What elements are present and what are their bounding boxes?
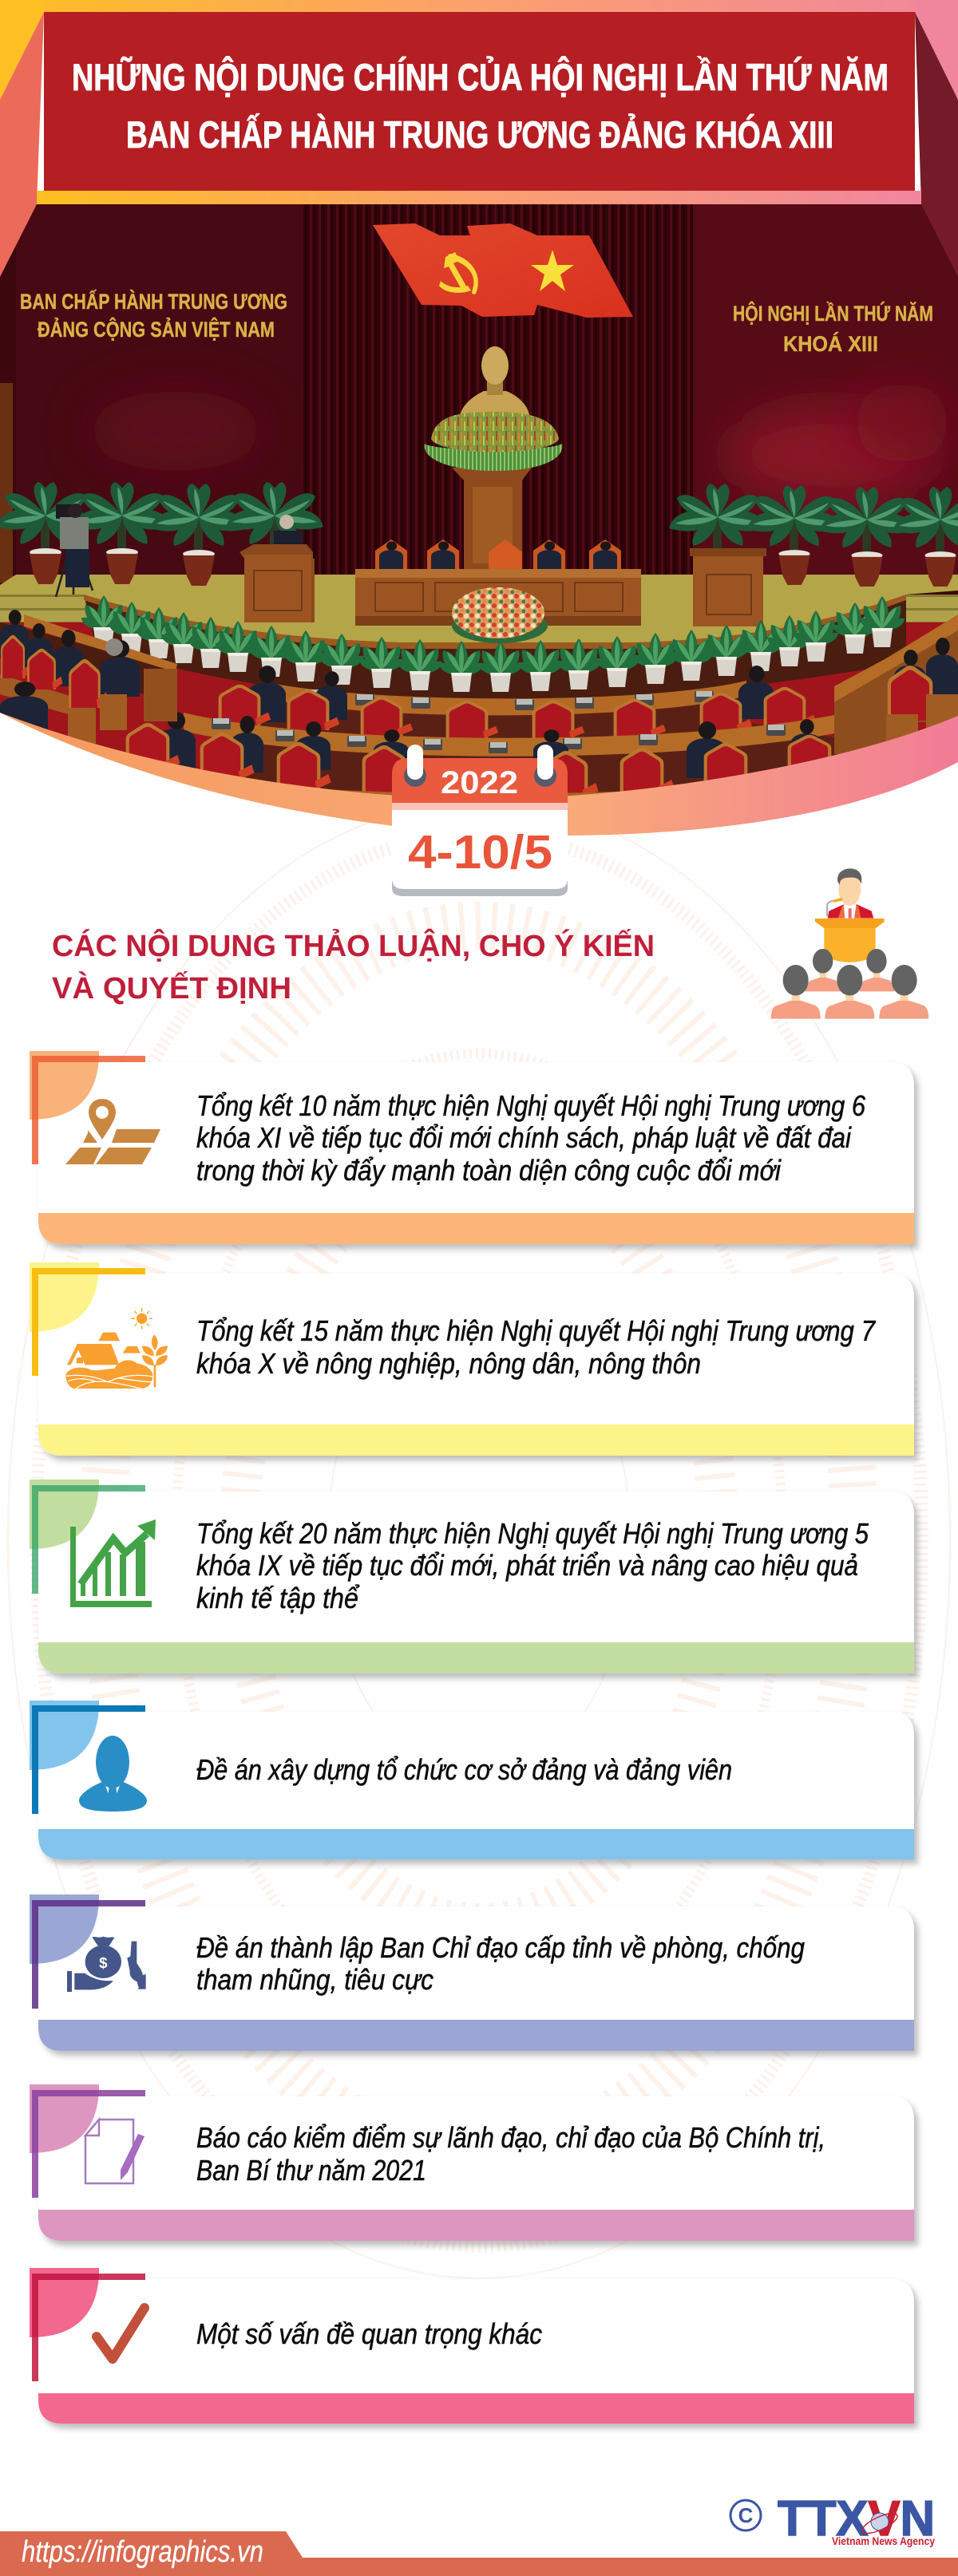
wall lettering: ĐẢNG CỘNG SẢN VIỆT NAM xyxy=(38,316,275,342)
logo: TTXVN: TTXVN xyxy=(778,2491,935,2546)
website: https://infographics.vn xyxy=(22,2535,263,2569)
stage wall, stairs, floor xyxy=(0,575,958,814)
section heading: VÀ QUYẾT ĐỊNH xyxy=(52,970,291,1006)
card footer band xyxy=(38,1829,914,1859)
presidium table with officials xyxy=(355,539,641,626)
header band xyxy=(0,0,958,100)
panel: item 3 collective economy xyxy=(30,1480,914,1673)
date: 4-10/5 xyxy=(408,826,552,879)
flag xyxy=(373,223,633,318)
icon: farm xyxy=(66,1308,168,1389)
card footer band xyxy=(38,1642,914,1673)
item text xyxy=(196,2121,825,2187)
panel: item 4 party organisation xyxy=(30,1701,914,1859)
card body xyxy=(38,1274,914,1456)
item text xyxy=(196,1314,877,1380)
card body xyxy=(38,1062,914,1244)
card footer band xyxy=(38,2020,914,2051)
icon: map pin on land xyxy=(65,1099,160,1164)
icon: document and pen xyxy=(85,2120,144,2183)
header side panels xyxy=(0,12,958,277)
corner accent xyxy=(30,2084,145,2198)
left block xyxy=(0,622,177,722)
corner accent xyxy=(30,1894,145,2009)
icon: money bag and refusing hand: $ xyxy=(99,1954,108,1971)
delegates seating rows xyxy=(0,610,958,796)
card footer band xyxy=(38,1424,914,1456)
card body xyxy=(38,1906,914,2051)
item text: Tổng kết 20 năm thực hiện Nghị quyết Hội nghị Trung ương 5 xyxy=(196,1517,869,1550)
section heading: CÁC NỘI DUNG THẢO LUẬN, CHO Ý KIẾN xyxy=(52,927,655,963)
panel: item 6 review report xyxy=(30,2084,914,2241)
icon: party member xyxy=(79,1736,147,1811)
corner accent xyxy=(30,1262,145,1376)
footer bar xyxy=(0,2531,958,2576)
corner accent xyxy=(30,1480,145,1594)
corner accent xyxy=(30,2268,145,2381)
item text: Tổng kết 15 năm thực hiện Nghị quyết Hội nghị Trung ương 7 xyxy=(196,1314,877,1347)
section heading xyxy=(52,927,655,1006)
logo: TTXVN: Vietnam News Agency xyxy=(832,2535,935,2547)
wall lettering xyxy=(20,289,933,356)
calendar date badge xyxy=(392,745,568,896)
bust xyxy=(459,346,530,419)
card body xyxy=(38,1712,914,1859)
wall lettering: KHOÁ XIII xyxy=(783,331,878,356)
item text xyxy=(196,1089,866,1187)
card body xyxy=(38,1491,914,1673)
wall lettering: BAN CHẤP HÀNH TRUNG ƯƠNG xyxy=(20,289,287,314)
icon: check mark xyxy=(97,2308,144,2359)
panel: item 7 other matters xyxy=(30,2268,914,2424)
item text xyxy=(196,1931,805,1996)
icon: speaker and audience xyxy=(771,868,928,1019)
item text: Báo cáo kiểm điểm sự lãnh đạo, chỉ đạo của Bộ Chính trị, xyxy=(196,2121,825,2154)
card body xyxy=(38,2096,914,2241)
card footer band xyxy=(38,2393,914,2424)
right block xyxy=(834,614,958,758)
title text xyxy=(72,56,889,156)
item text xyxy=(196,1517,869,1614)
bouquet xyxy=(452,587,548,643)
palms xyxy=(0,482,958,587)
item text: Ban Bí thư năm 2021 xyxy=(196,2154,426,2187)
item text: Tổng kết 10 năm thực hiện Nghị quyết Hội nghị Trung ương 6 xyxy=(196,1089,866,1122)
item text: tham nhũng, tiêu cực xyxy=(196,1963,433,1996)
item text: khóa IX về tiếp tục đổi mới, phát triển và nâng cao hiệu quả xyxy=(196,1549,858,1582)
item text: Đề án xây dựng tổ chức cơ sở đảng và đảng viên xyxy=(196,1753,732,1786)
background: faint bronze drum pattern xyxy=(8,802,950,2278)
photo: conference hall xyxy=(0,204,958,822)
panel: item 2 agriculture xyxy=(30,1262,914,1456)
card footer band xyxy=(38,2210,914,2241)
cameraman xyxy=(56,504,93,597)
copyright mark xyxy=(730,2500,761,2531)
card body xyxy=(38,2279,914,2424)
item text: kinh tế tập thể xyxy=(196,1582,360,1614)
corner accent xyxy=(30,1051,145,1164)
icon: growth chart xyxy=(70,1519,156,1607)
item text: khóa XI về tiếp tục đổi mới chính sách, pháp luật về đất đai xyxy=(196,1121,852,1154)
corner accent xyxy=(30,1701,145,1814)
flower stand xyxy=(425,412,562,569)
panel: item 1 land xyxy=(30,1051,914,1244)
item text: Một số vấn đề quan trọng khác xyxy=(196,2317,542,2350)
item text: trong thời kỳ đẩy mạnh toàn diện công cuộc đổi mới xyxy=(196,1154,782,1187)
calendar rings xyxy=(404,745,556,787)
band under photo xyxy=(0,713,958,836)
year: 2022 xyxy=(441,765,518,800)
card footer band xyxy=(38,1213,914,1244)
item text: khóa X về nông nghiệp, nông dân, nông thôn xyxy=(196,1347,701,1380)
icon: money bag and refusing hand xyxy=(67,1937,146,1992)
row of potted plants xyxy=(81,595,905,692)
copyright mark: C xyxy=(738,2503,754,2527)
panel: item 5 anti-corruption xyxy=(30,1894,914,2051)
title panel xyxy=(44,12,915,191)
item text: Đề án thành lập Ban Chỉ đạo cấp tỉnh về phòng, chống xyxy=(196,1931,805,1964)
podiums xyxy=(240,515,766,626)
